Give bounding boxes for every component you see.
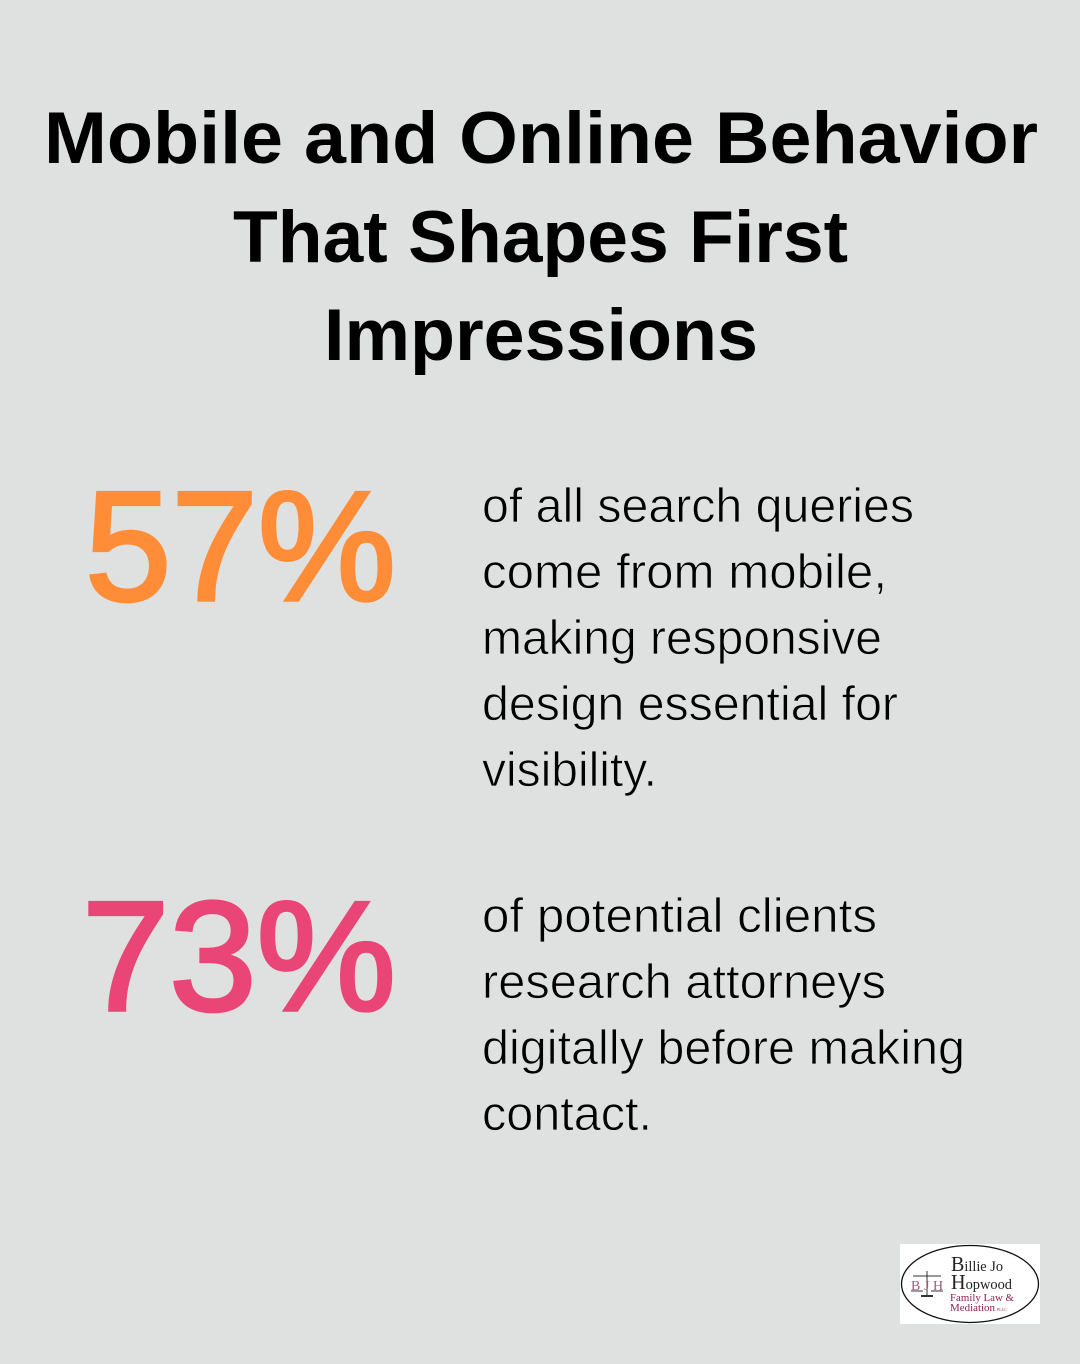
text block: potential clients research <box>482 890 965 1141</box>
logo: Billie Jo Hopwood Family Law and Mediation: Hopwood <box>951 1270 1012 1294</box>
logo: Billie Jo Hopwood Family Law and Mediation: Billie Jo <box>951 1252 1003 1276</box>
title: That Shapes First <box>233 197 848 278</box>
stat: 73%: 73% <box>82 870 396 1044</box>
text block: mobile search queries: design essential for <box>482 678 898 731</box>
text block: potential clients research: research attorneys <box>482 956 886 1009</box>
logo: Billie Jo Hopwood Family Law and Mediation: J <box>924 1279 930 1294</box>
text block: mobile search queries: of all search queries <box>482 480 914 533</box>
title: Mobile and Online Behavior <box>44 98 1038 179</box>
logo: Billie Jo Hopwood Family Law and Mediation: Family Law & <box>950 1292 1014 1304</box>
stat: 57%: 57% <box>85 460 396 634</box>
logo: Billie Jo Hopwood Family Law and Mediation: Mediation <box>950 1302 995 1314</box>
logo: Billie Jo Hopwood Family Law and Mediation: H <box>933 1279 943 1294</box>
logo: Billie Jo Hopwood Family Law and Mediation <box>900 1244 1040 1324</box>
title <box>44 98 1038 376</box>
text block: potential clients research: contact. <box>482 1088 652 1141</box>
text block: potential clients research: of potential clients <box>482 890 877 943</box>
icon: scales of justice <box>911 1271 943 1296</box>
text block: mobile search queries: making responsive <box>482 612 882 665</box>
text block: potential clients research: digitally before making <box>482 1022 965 1075</box>
title: Impressions <box>324 295 758 376</box>
logo: Billie Jo Hopwood Family Law and Mediation: PLLC <box>997 1307 1007 1312</box>
text block: mobile search queries: come from mobile, <box>482 546 887 599</box>
text block: mobile search queries <box>482 480 914 797</box>
text block: mobile search queries: visibility. <box>482 744 657 797</box>
logo: Billie Jo Hopwood Family Law and Mediation: B <box>911 1279 920 1294</box>
